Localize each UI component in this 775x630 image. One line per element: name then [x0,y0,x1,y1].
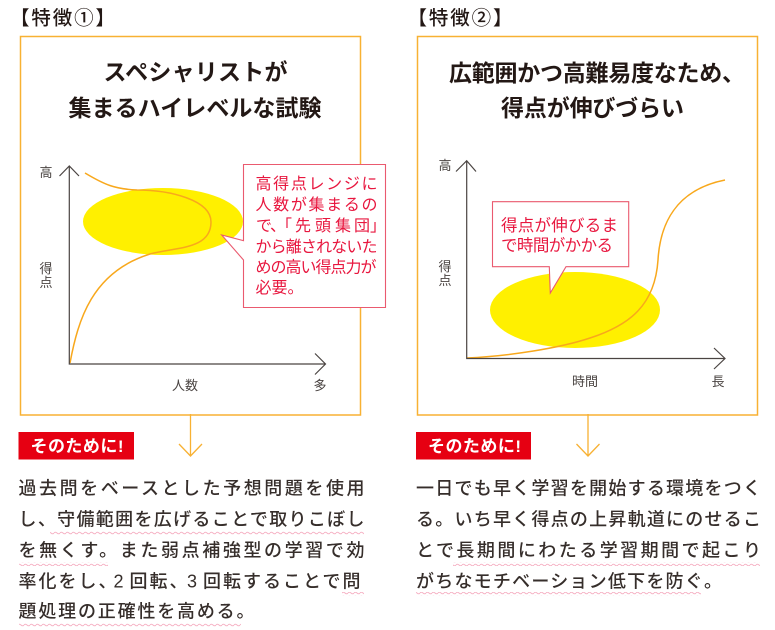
paragraph: 3 [187,572,199,592]
callout text: 必要。 [256,279,304,297]
paragraph [416,478,761,592]
panel border [20,36,360,415]
body text with wavy underlines [18,478,364,627]
callout text: で時間がかかる [501,236,613,255]
arrow: down [576,414,600,456]
heading: feature 1 label: 【特徴①】 [10,8,115,30]
axis labels [438,158,725,389]
badge: そのために!: そのために! [428,437,521,456]
axis labels [40,165,327,393]
score curve [70,173,211,363]
paragraph: 2 [114,572,126,592]
chart: score vs number of people [40,165,327,393]
body text with wavy underlines [416,478,761,596]
axis labels: 人数 [172,378,198,393]
callout: high score range [222,164,386,308]
panel title: スペシャリストが [104,59,288,85]
paragraph: がちなモチベーション低下を防ぐ。 [416,570,722,592]
axis labels: 点 [438,273,452,288]
column: feature 1 [10,8,386,627]
heading: feature 2 label: 【特徴②】 [408,8,512,30]
callout text: で、「先頭集団」 [256,217,386,235]
column: feature 2 [408,8,761,596]
axes [60,166,326,374]
axes [456,161,725,369]
paragraph: 過去問をベースとした予想問題を使用 [18,478,364,498]
panel title: 広範囲かつ高難易度なため、 [449,60,745,86]
panel title [449,60,745,121]
callout text: めの高い得点力が [256,258,376,276]
panel title: 集まるハイレベルな試験 [68,95,322,121]
paragraph: 回転、 [130,572,190,592]
axis labels: 高 [40,165,53,180]
chart: score vs time [438,158,725,389]
arrow: down [179,414,202,456]
callout text: 人数が集まるの [256,196,378,214]
paragraph: 率化をし、 [18,572,118,592]
badge: そのために! [416,432,531,460]
callout text: から離されないた [256,238,378,256]
axis labels: 得 [40,261,53,276]
paragraph: を無くす。また弱点補強型の学習で効 [18,540,364,560]
axis labels: 時間 [572,374,598,389]
wavy underlines [416,562,760,596]
paragraph: る。いち早く得点の上昇軌道にのせるこ [416,510,761,530]
axis labels: 点 [40,275,53,290]
callout text: 高得点レンジに [256,175,378,193]
badge: そのために!: そのために! [30,437,124,456]
paragraph: 一日でも早く学習を開始する環境をつく [416,478,761,498]
panel title: 得点が伸びづらい [501,95,684,121]
wavy underlines [19,531,364,627]
paragraph: 回転することで問 [203,572,362,592]
paragraph: とで長期間にわたる学習期間で起こり [416,540,761,560]
callout text: 得点が伸びるま [501,216,618,235]
axis labels: 得 [438,259,452,274]
paragraph: し、守備範囲を広げることで取りこぼし [18,510,364,530]
badge: そのために! [18,432,134,460]
panel border [418,36,758,415]
axis labels: 多 [314,378,327,393]
callout box [222,164,386,308]
callout text [256,175,386,297]
callout text [501,216,618,255]
highlight ellipse [83,188,243,255]
panel: feature 2 [418,36,758,415]
panel title [68,59,322,121]
score curve [467,180,725,358]
callout: takes time [492,202,629,293]
axis labels: 長 [712,374,725,389]
axis labels: 高 [438,158,452,173]
paragraph [18,478,364,622]
callout box [492,202,629,293]
paragraph: 題処理の正確性を高める。 [18,602,254,622]
highlight ellipse [490,272,660,348]
panel: feature 1 [20,36,386,415]
